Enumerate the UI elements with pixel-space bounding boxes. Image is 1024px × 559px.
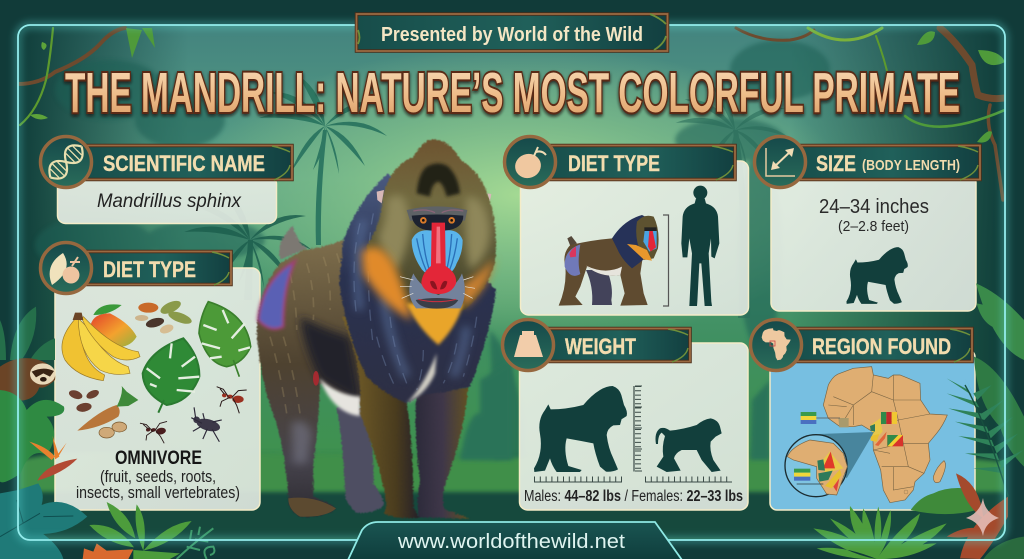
- blue ridge left: [412, 230, 432, 276]
- background palm tree low left: [184, 190, 312, 300]
- card: height comparison: [520, 161, 748, 315]
- orange cheek left: [362, 247, 412, 320]
- leaf veins: [0, 500, 73, 537]
- card: size: [771, 175, 976, 311]
- fern leaflets: [947, 378, 1023, 473]
- header: size: [754, 136, 980, 188]
- flag: Gabon left: [801, 412, 840, 424]
- shoulder cape: [339, 173, 496, 403]
- foliage lower left: [0, 307, 214, 559]
- ears: [377, 190, 491, 203]
- text: 2–2.8 feet: (2–2.8 feet): [838, 218, 909, 235]
- white belly: [319, 378, 361, 416]
- header: weight: [502, 320, 690, 370]
- hind fur streaks: [270, 253, 344, 413]
- mandrill silhouette small: [846, 247, 908, 304]
- rear foot: [288, 498, 336, 517]
- yellow beard: [407, 303, 463, 345]
- heading: size: SIZE: [816, 151, 856, 176]
- flag: Gabon inset: [794, 469, 810, 481]
- upper right leaves: [976, 283, 1024, 360]
- website url: www.worldofthewild.net: [397, 531, 625, 553]
- panel: region found map: [770, 350, 975, 510]
- heading: diet type: DIET TYPE: [568, 151, 660, 176]
- text: 24–34 inches: 24–34 inches: [819, 195, 929, 218]
- dark underside: [300, 317, 362, 403]
- panel: scientific name: [58, 176, 276, 224]
- footer tab: [348, 522, 682, 559]
- card: weight: [520, 343, 748, 510]
- text: insects, small vertebrates: insects, small vertebrates): [76, 484, 240, 502]
- rear leg slate highlight: [292, 421, 312, 463]
- panel: diet type comparison: [520, 161, 748, 315]
- vertical scale ruler: [634, 386, 642, 472]
- dark crown: [417, 163, 460, 197]
- rump colour patch: [258, 261, 295, 329]
- illustration: foods and insects: [62, 298, 251, 447]
- small mandrill illustration: [559, 215, 659, 306]
- header: scientific name: [40, 136, 292, 188]
- text: male and female weights: Males: 44–82 lbs / Females: 22–33 lbs: [524, 488, 743, 505]
- brow: [407, 206, 467, 221]
- orange flower bottom: [83, 543, 133, 559]
- badge: weight icon: [502, 320, 554, 370]
- cape blue highlights: [357, 220, 467, 377]
- magnifier inset: [785, 432, 874, 497]
- nose highlight: [436, 227, 441, 263]
- header: diet type middle: [504, 136, 735, 188]
- red nose: [421, 223, 456, 294]
- back leaves: [0, 307, 55, 360]
- whiskers: [400, 277, 475, 298]
- card: omnivore: [55, 268, 260, 510]
- badge: DNA icon: [40, 136, 92, 188]
- flag: Republic of Congo: [887, 435, 903, 446]
- monstera leaf: [0, 390, 64, 482]
- badge: leaf and apple icon: [40, 242, 92, 294]
- dark leaf corner: [983, 537, 1024, 559]
- background palm tree behind heading: [259, 76, 387, 245]
- near front leg: [342, 317, 419, 518]
- header: region found: [750, 320, 972, 370]
- human silhouette: [681, 186, 719, 306]
- far hind leg: [337, 407, 384, 513]
- heading: region found: REGION FOUND: [812, 334, 951, 359]
- badge: size arrow icon: [754, 136, 806, 188]
- mandrill main illustration: [257, 139, 496, 519]
- hindquarters and rear leg: [257, 240, 383, 517]
- badge: fruit icon: [504, 136, 556, 188]
- background dark palm right: [676, 85, 791, 318]
- panel: size body length: [771, 175, 976, 311]
- mouth: [416, 298, 458, 309]
- map water: [770, 350, 975, 510]
- eye mask: [412, 214, 463, 231]
- fern spine: [965, 385, 1008, 497]
- head fur: [367, 139, 496, 310]
- eyes: [420, 217, 455, 224]
- map of Africa: [823, 367, 947, 503]
- panel: diet type omnivore: [55, 268, 260, 510]
- heading: body length: (BODY LENGTH): [862, 157, 960, 174]
- horizontal scale rulers: [534, 479, 732, 482]
- far front leg: [416, 387, 470, 519]
- female silhouette: [655, 418, 722, 472]
- orange cheek right: [461, 258, 494, 308]
- blue ridge right: [443, 230, 463, 276]
- muzzle: [409, 273, 465, 308]
- banner: presented by: [356, 14, 668, 51]
- foliage lower right: [813, 283, 1024, 559]
- vines top left: [18, 28, 155, 125]
- flag: Cameroon: [881, 412, 897, 424]
- text: presented by World of the Wild: Presented by World of the Wild: [381, 24, 643, 46]
- nostrils: [430, 281, 447, 289]
- small fern: [177, 527, 214, 559]
- height bracket: [663, 215, 668, 306]
- card: scientific name: [58, 176, 276, 224]
- text: fruit, seeds, roots: (fruit, seeds, roots,: [100, 468, 216, 486]
- white chest: [407, 353, 437, 403]
- text: OMNIVORE: OMNIVORE: [115, 448, 202, 469]
- text: Mandrillus sphinx: Mandrillus sphinx: [97, 191, 242, 212]
- male silhouette: [534, 386, 627, 472]
- header: diet type left: [40, 242, 231, 294]
- vines top right: [736, 28, 1005, 200]
- heading: scientific name: SCIENTIFIC NAME: [103, 151, 265, 176]
- panel: weight: [520, 343, 748, 510]
- bird of paradise flower: [29, 436, 77, 481]
- ridge lines: [417, 234, 457, 272]
- bottom fan leaves: [813, 506, 947, 559]
- teal leaves: [0, 483, 87, 559]
- badge: Africa icon: [750, 320, 802, 370]
- tail: [279, 225, 307, 259]
- green leaves bottom: [89, 502, 192, 559]
- cape fur streaks: [354, 213, 477, 390]
- heading: weight: WEIGHT: [565, 334, 636, 359]
- red flank accent: [313, 371, 319, 386]
- red leaves: [947, 473, 1008, 559]
- broad leaf: [911, 488, 977, 514]
- heading: diet type: DIET TYPE: [103, 257, 196, 282]
- watermark sparkle: [966, 498, 999, 536]
- pale head sides: [378, 195, 490, 270]
- side leaves: [974, 357, 1024, 467]
- ferret animal: [0, 358, 55, 401]
